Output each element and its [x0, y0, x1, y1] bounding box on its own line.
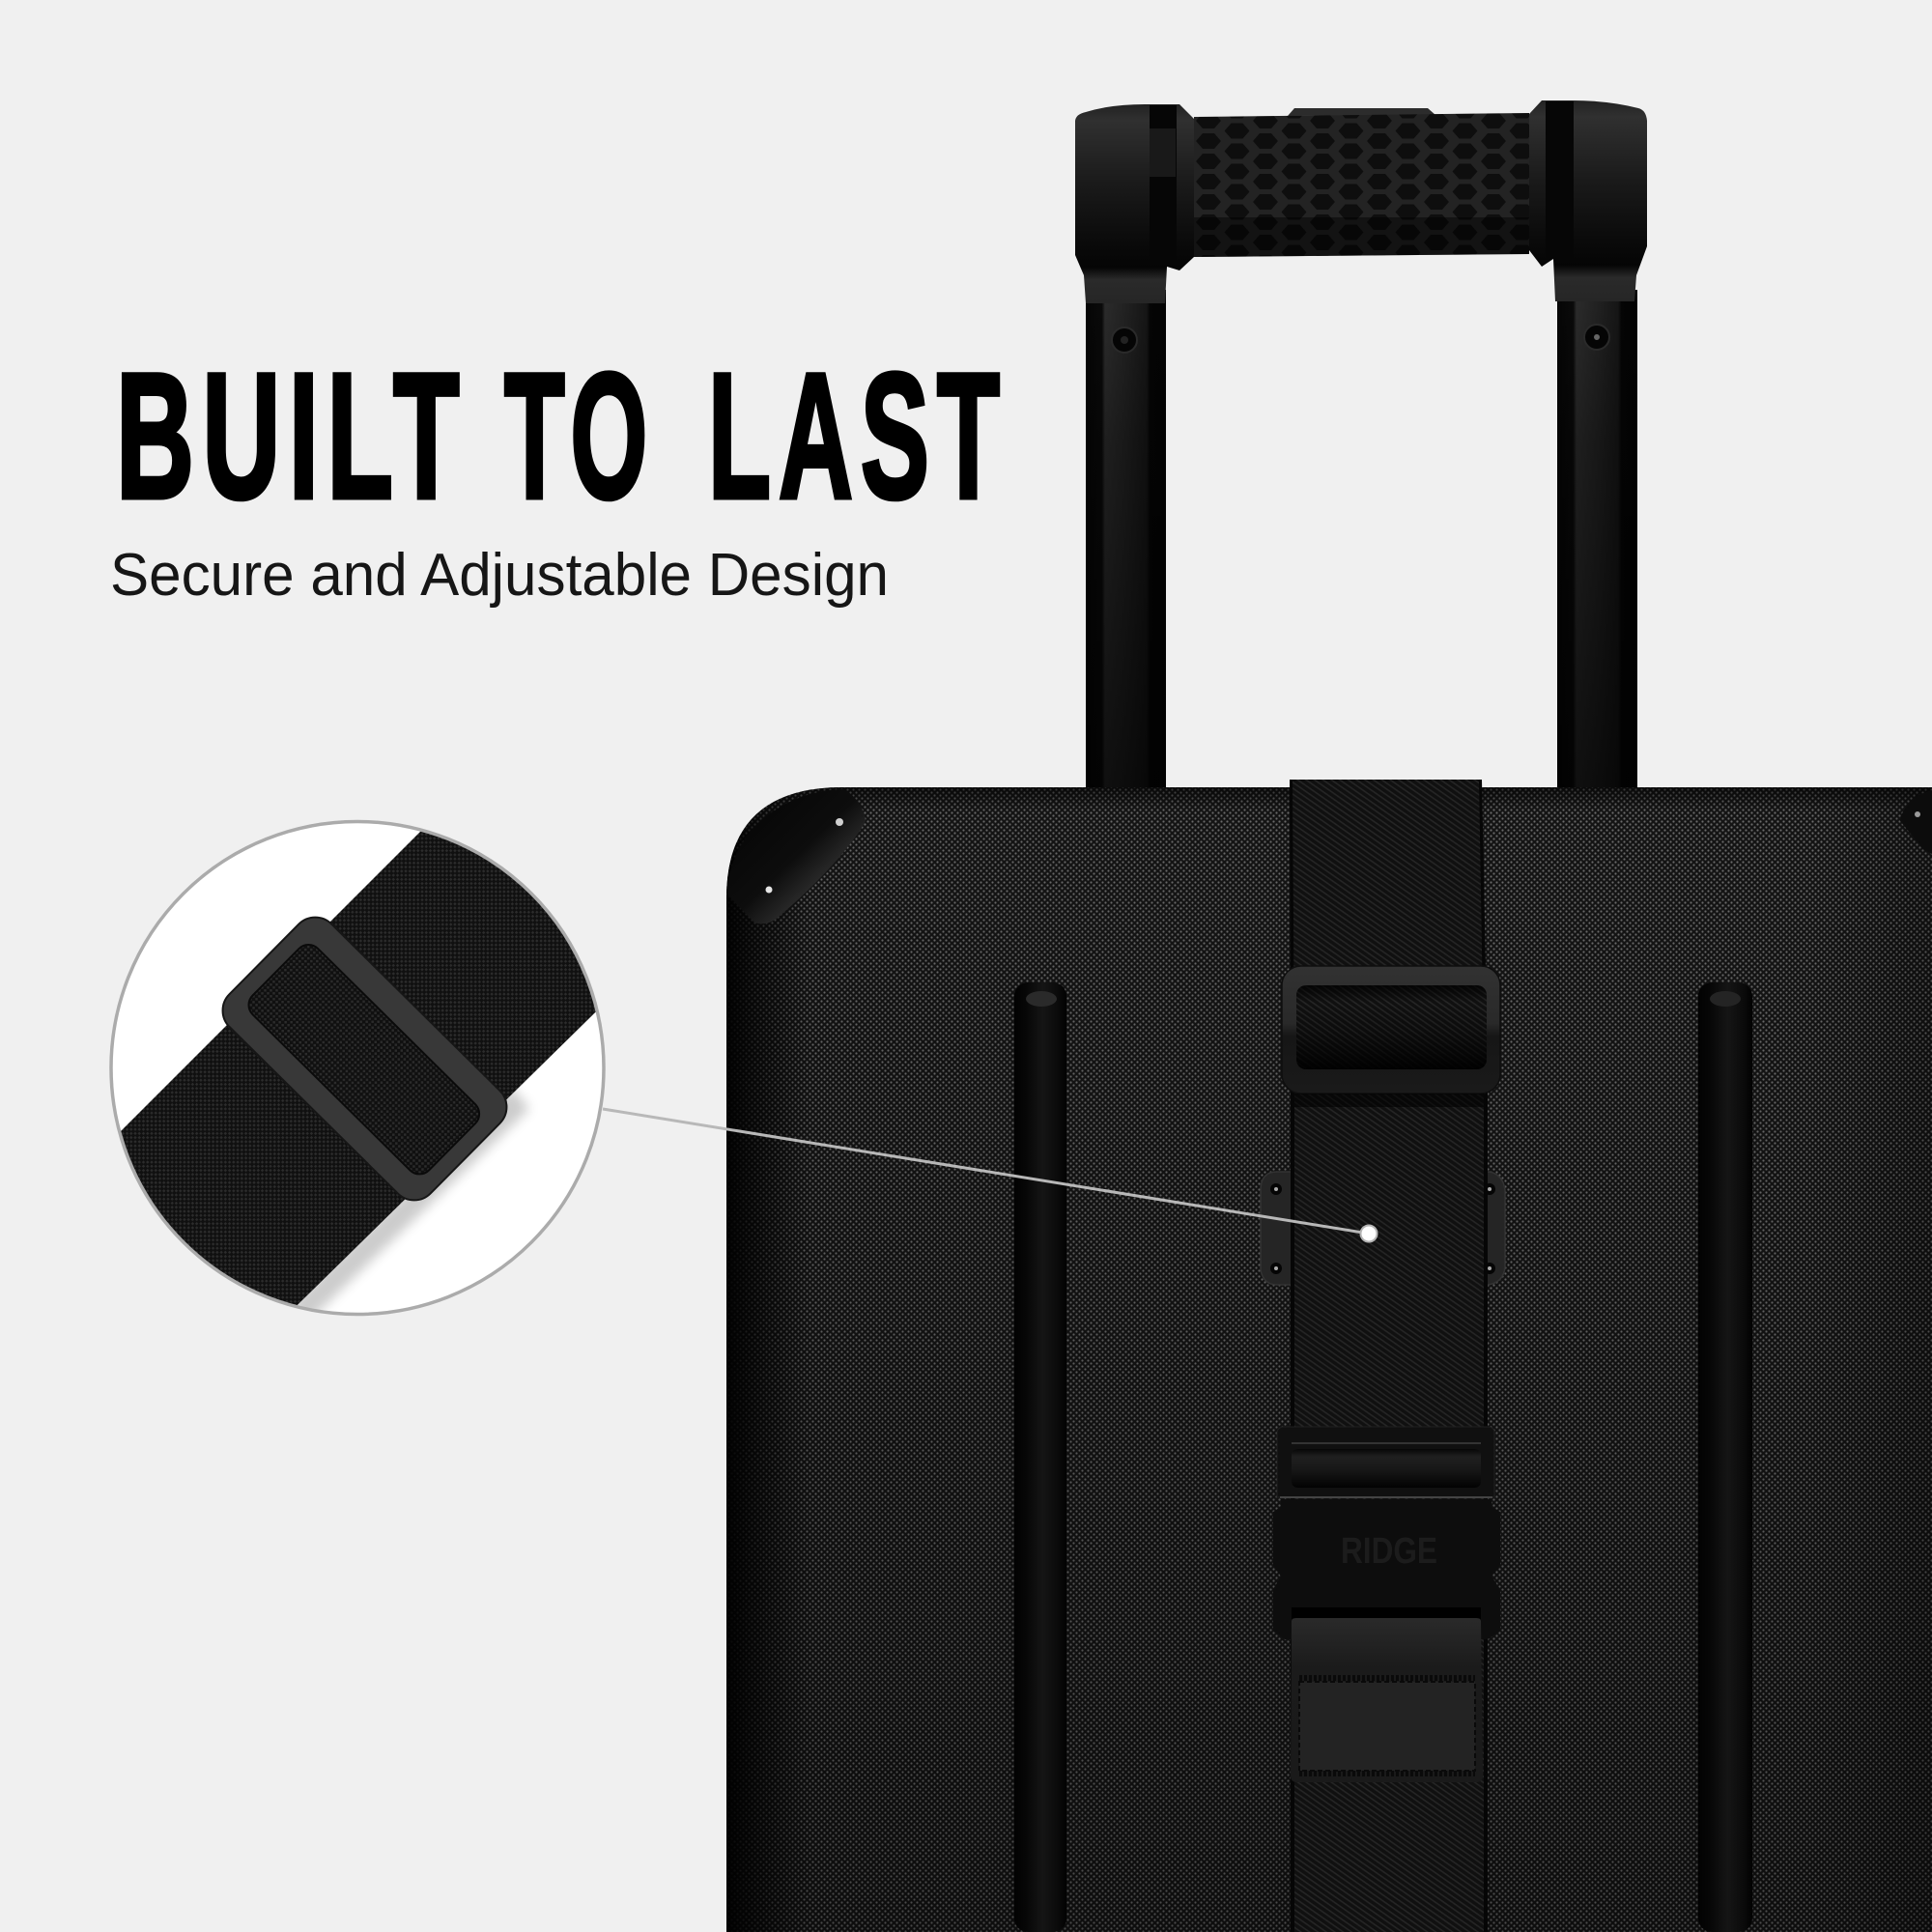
- left handle end cap: [1075, 104, 1194, 303]
- subtitle: Secure and Adjustable Design: [110, 542, 889, 609]
- left carbon mounting plate: [1261, 1172, 1299, 1285]
- left corner guard: [726, 789, 866, 923]
- buckle body: [1273, 1499, 1500, 1639]
- right handle tube: [1557, 290, 1637, 792]
- title: BUILT: [116, 337, 468, 536]
- left handle tube: [1086, 290, 1166, 792]
- side release buckle: [1273, 1427, 1500, 1782]
- title: [116, 337, 1008, 536]
- right carbon mounting plate: [1478, 1172, 1505, 1285]
- luggage strap: [1290, 780, 1488, 1932]
- magnified strap: [121, 831, 595, 1310]
- slider buckle: [1282, 966, 1500, 1107]
- callout connector line: [603, 1109, 1369, 1234]
- callout anchor dot: [1360, 1225, 1378, 1242]
- left rail: [1014, 982, 1066, 1932]
- magnified slider buckle: [213, 908, 516, 1209]
- telescopic handle: [1075, 100, 1647, 792]
- textured grip: [1194, 108, 1529, 257]
- right rail: [1698, 982, 1752, 1932]
- magnified detail circle: [109, 819, 606, 1316]
- embossed RIDGE logo: RIDGE: [1341, 1531, 1437, 1572]
- buckle top bar: [1277, 1427, 1494, 1498]
- suitcase body: [726, 787, 1932, 1932]
- title: TO: [504, 337, 655, 536]
- right handle end cap: [1529, 100, 1647, 301]
- title: LAST: [708, 337, 1008, 536]
- detail circle outline: [111, 821, 604, 1314]
- strap end tab: [1291, 1618, 1483, 1782]
- right corner guard: [1900, 790, 1932, 854]
